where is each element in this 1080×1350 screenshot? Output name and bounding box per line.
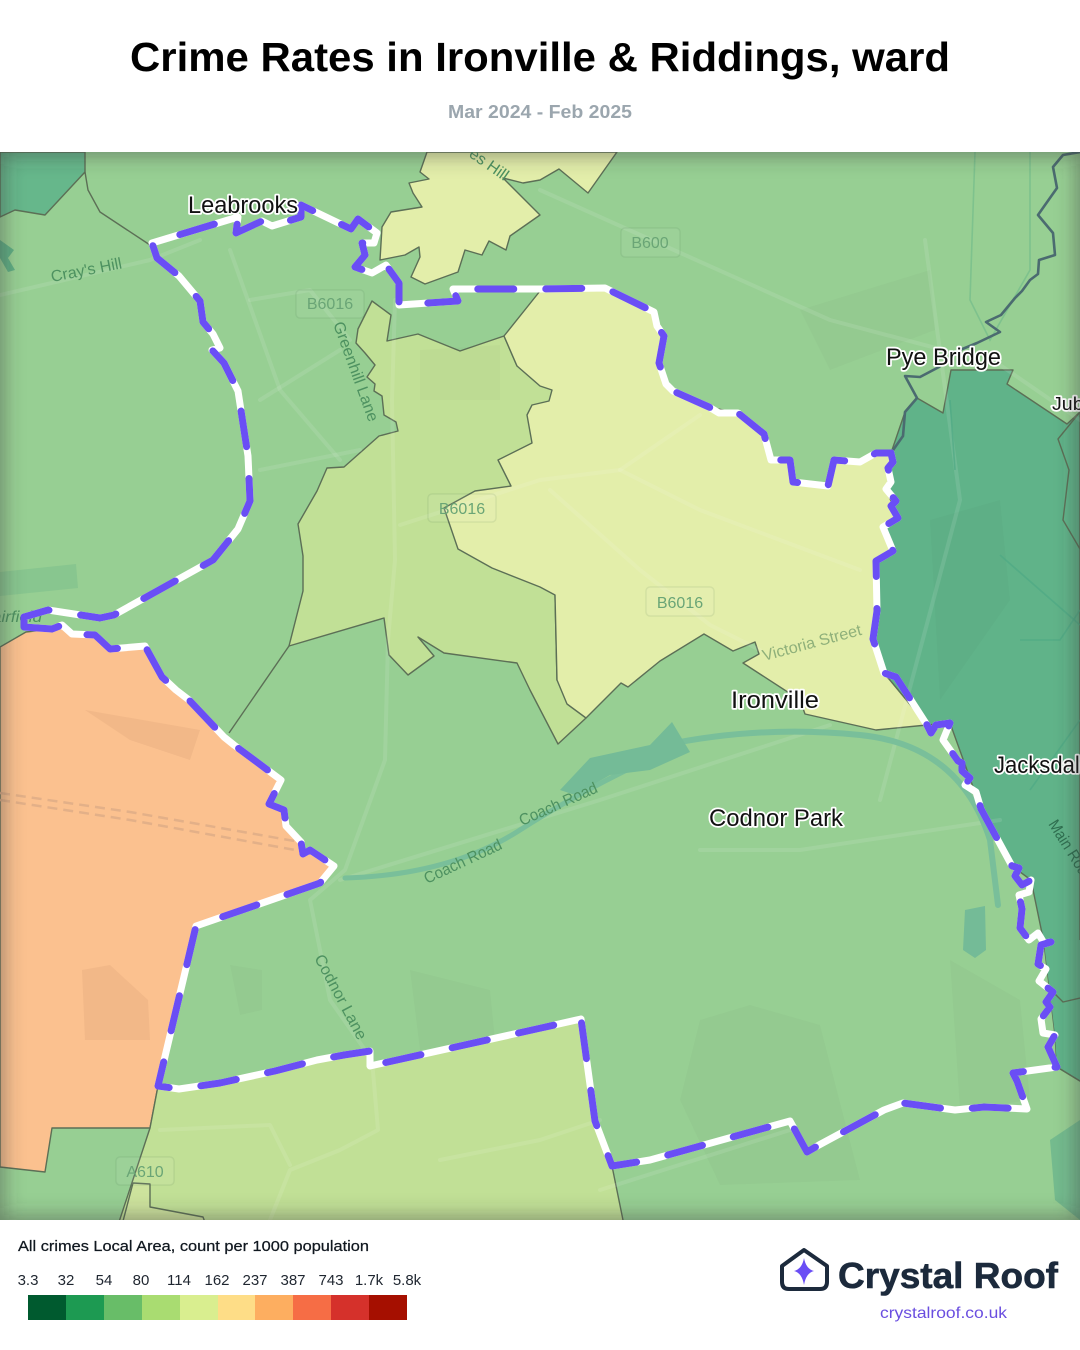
road label: Cray's Hill: Cray's Hill — [50, 256, 123, 286]
place: Ironville: Ironville — [731, 687, 819, 714]
legend values: 114 — [167, 1272, 191, 1289]
road label: Victoria Street: Victoria Street — [761, 622, 864, 665]
legend values: 1.7k — [355, 1272, 384, 1289]
legend colour scale — [28, 1295, 407, 1320]
canal water — [345, 732, 998, 905]
shield: B6016 centre — [428, 494, 496, 522]
orange area shading — [82, 710, 200, 1040]
road label: Coach Road west: Coach Road — [422, 837, 505, 888]
logo icon: house with star — [782, 1250, 827, 1289]
shield: A610: A610 — [126, 1164, 164, 1181]
shield: B6016 centre: B6016 — [439, 501, 485, 518]
dark tree patch at west edge — [0, 240, 15, 272]
place labels — [188, 192, 1080, 832]
region dividers — [85, 172, 1080, 1081]
Crystal Roof logo — [782, 1250, 1059, 1322]
small pond — [963, 906, 986, 958]
legend values: 54 — [96, 1272, 112, 1289]
river Erewash — [891, 152, 1080, 453]
region: central light green — [289, 301, 586, 744]
shield: B6016 north: B6016 — [307, 296, 353, 313]
place: Pye Bridge: Pye Bridge — [886, 344, 1001, 371]
region: main pale yellow Ironville — [444, 288, 927, 730]
region: north-west dark green — [0, 152, 85, 217]
woodland shading — [230, 270, 1030, 1185]
shield: B600 — [621, 228, 680, 257]
road label: es Hill: es Hill — [466, 145, 511, 185]
legend values: 3.3 — [18, 1272, 38, 1289]
shield: B600: B600 — [631, 235, 669, 252]
road label: Coach Road east: Coach Road — [517, 780, 600, 830]
title: Crime Rates in Ironville & Riddings, ward — [130, 34, 950, 80]
legend values — [18, 1272, 422, 1289]
legend values: 237 — [242, 1272, 268, 1289]
boundary purple dashes — [24, 205, 1057, 1166]
region: north pale yellow Riddings — [380, 152, 617, 284]
shield: B6016 east: B6016 — [657, 595, 703, 612]
shield: B6016 east — [646, 587, 714, 616]
legend values: 5.8k — [393, 1272, 422, 1289]
website URL: crystalroof.co.uk — [880, 1305, 1008, 1322]
reservoir — [560, 722, 690, 795]
legend values: 387 — [280, 1272, 306, 1289]
legend values: 32 — [58, 1272, 74, 1289]
road labels — [0, 145, 1080, 1043]
road label: Greenhill Lane: Greenhill Lane — [329, 320, 381, 424]
region: far south-east dark green — [1044, 940, 1080, 1081]
boundary white underlay — [24, 205, 1057, 1166]
subtitle: date range: Mar 2024 - Feb 2025 — [448, 102, 632, 122]
legend values: 743 — [318, 1272, 344, 1289]
shield: B6016 north — [296, 290, 364, 318]
river south-east — [1050, 1120, 1080, 1220]
road shields — [116, 228, 714, 1185]
place: Leabrooks: Leabrooks — [188, 192, 298, 219]
road label: Codnor Lane: Codnor Lane — [310, 952, 370, 1043]
stream east — [950, 152, 1080, 790]
region: east dark green — [873, 370, 1080, 1081]
railway track on orange area — [0, 793, 300, 850]
legend — [18, 1238, 422, 1320]
minor roads — [0, 190, 1080, 1220]
region: east line — [1058, 412, 1080, 549]
region: orange high-crime area — [0, 625, 334, 1172]
legend values: 162 — [204, 1272, 230, 1289]
logo wordmark: Crystal Roof — [838, 1255, 1059, 1296]
region: small south area — [122, 1182, 205, 1220]
legend title: All crimes Local Area, count per 1000 population — [18, 1238, 369, 1255]
legend values: 80 — [133, 1272, 149, 1289]
region: south light green — [118, 1019, 624, 1225]
place: Codnor Park: Codnor Park — [709, 805, 844, 832]
shield: A610 — [116, 1157, 174, 1185]
dotted patch west — [0, 564, 78, 596]
ward boundary — [24, 205, 1057, 1166]
